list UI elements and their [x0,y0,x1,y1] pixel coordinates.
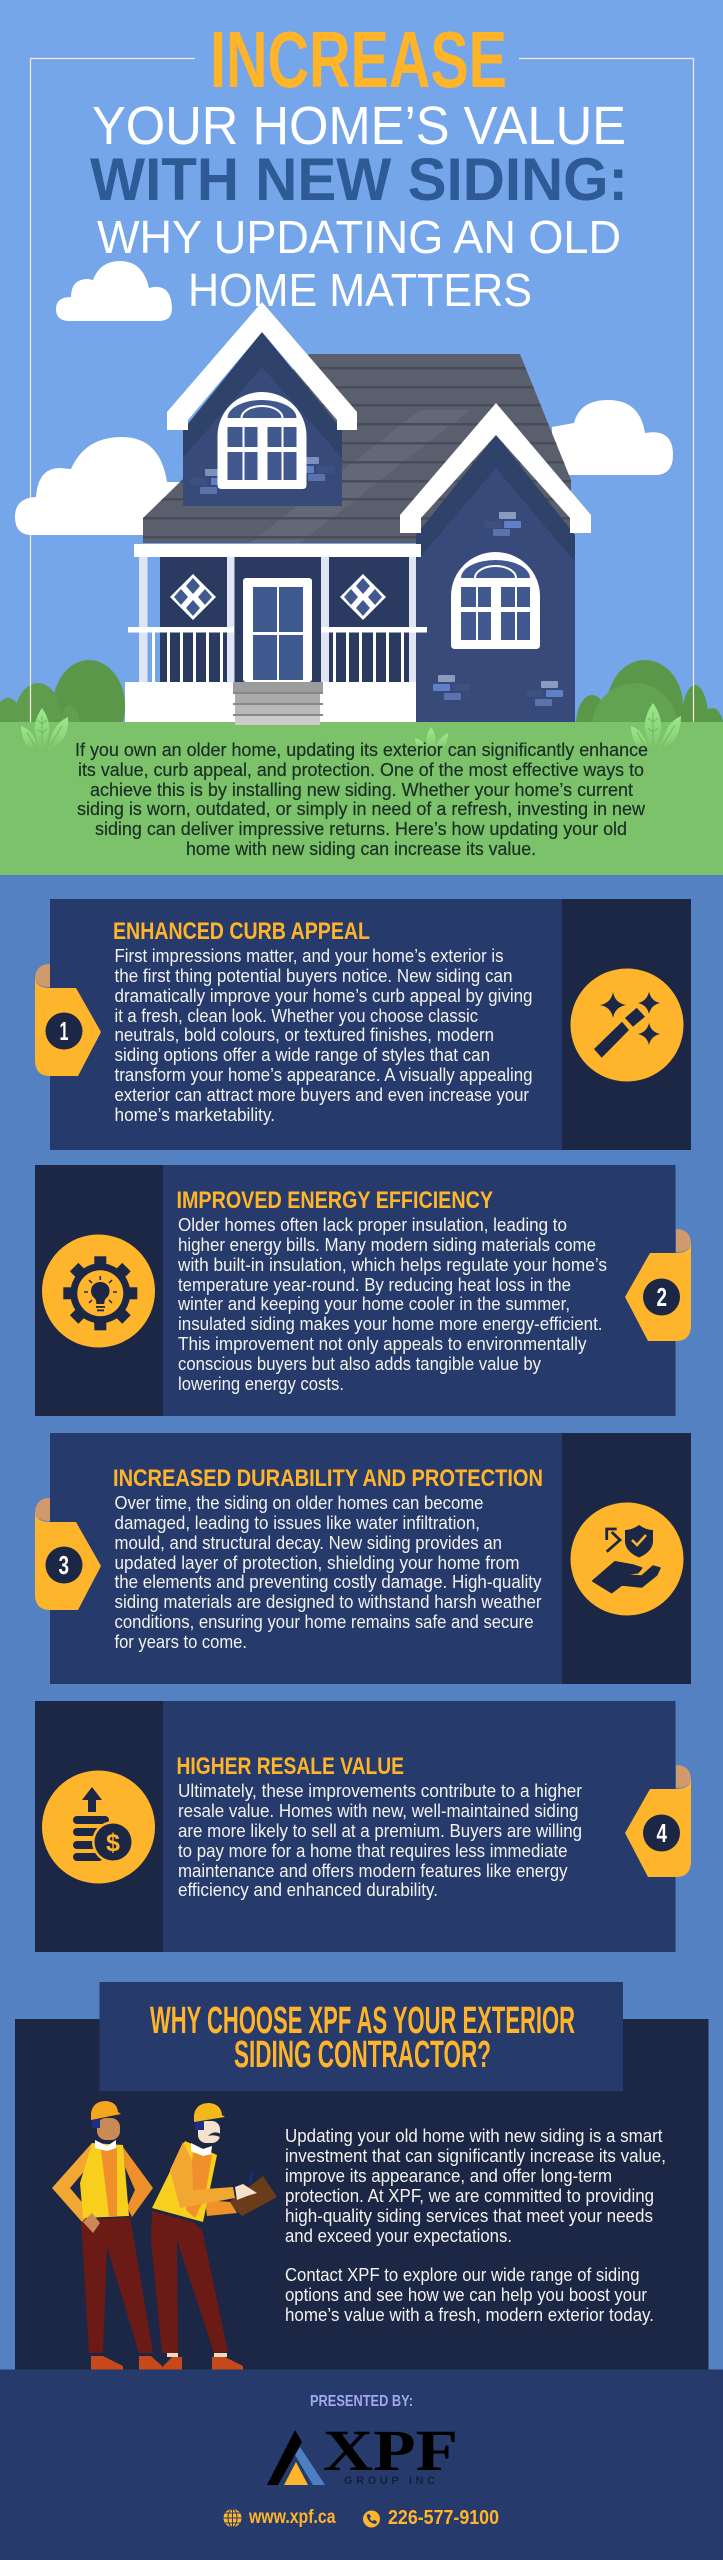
dormer bricks [190,457,334,494]
number tag 2 [625,1229,691,1341]
title: INCREASE [210,15,507,104]
intro paragraph: siding can deliver impressive returns. Here’s how updating your old [95,819,627,839]
body text [114,946,532,1125]
body text: it a fresh, clean look. Whether you choose classic [114,1006,478,1026]
body text: updated layer of protection, shielding your home from [114,1553,520,1573]
body text: higher energy bills. Many modern siding materials come [178,1235,596,1255]
intro paragraph [75,740,648,859]
heading banner: SIDING CONTRACTOR? [234,2034,491,2076]
body text: to pay more for a home that requires less immediate [178,1841,568,1861]
title [90,15,628,316]
website: www.xpf.ca [248,2507,336,2528]
title: YOUR HOME’S VALUE [92,96,626,156]
body text: home’s marketability. [114,1105,275,1125]
porch [125,544,427,723]
intro paragraph: If you own an older home, updating its exterior can significantly enhance [75,740,648,760]
worker left [52,2101,162,2370]
worker right [151,2103,277,2370]
body text: temperature year-round. By reducing heat loss in the [178,1275,571,1295]
green intro band [0,682,723,875]
plant: middle [415,727,448,750]
heading: ENHANCED CURB APPEAL [113,918,370,945]
dormer window [218,392,306,489]
closing text: and exceed your expectations. [285,2226,512,2246]
icon: coins with up arrow [42,1770,155,1884]
dormer [167,302,357,506]
heading banner [100,1982,623,2091]
icon: coins with up arrow: $ [106,1829,120,1857]
house illustration [125,302,591,723]
body text: This improvement not only appeals to environmentally [178,1334,586,1354]
plant: right [631,703,681,750]
heading: HIGHER RESALE VALUE [176,1753,404,1780]
body text: winter and keeping your home cooler in the summer, [177,1294,570,1314]
title: WHY UPDATING AN OLD [97,211,621,263]
heading: INCREASED DURABILITY AND PROTECTION [113,1465,543,1492]
presented by label: PRESENTED BY: [310,2393,413,2410]
diamond window left [170,574,216,620]
icon: magic wand [570,968,684,1082]
body text: siding materials are designed to withstand harsh weather [114,1592,542,1612]
body text: lowering energy costs. [178,1374,344,1394]
body text: are more likely to sell at a premium. Buyers are willing [178,1821,582,1841]
porch roof beam [134,544,421,557]
intro paragraph: its value, curb appeal, and protection. One of the most effective ways to [78,760,644,780]
wing window [451,552,540,649]
sky background [0,0,723,724]
intro paragraph: siding is worn, outdated, or simply in need of a refresh, investing in new [77,799,646,819]
closing text: investment that can significantly increase its value, [285,2146,666,2166]
hero section [0,0,723,771]
website [224,2507,336,2528]
body text: dramatically improve your home’s curb appeal by giving [114,986,532,1006]
body text: with built-in insulation, which helps regulate your home’s [177,1255,607,1275]
closing text: protection. At XPF, we are committed to providing [285,2186,654,2206]
number tag 3 [35,1498,101,1610]
body text: conscious buyers but also adds tangible value by [178,1354,541,1374]
closing text: improve its appearance, and offer long-term [285,2166,612,2186]
panel 2: improved energy efficiency [35,1165,691,1416]
body text: Ultimately, these improvements contribute to a higher [178,1781,582,1801]
title: WITH NEW SIDING: [90,146,628,213]
body text: for years to come. [114,1632,247,1652]
body text: damaged, leading to issues like water infiltration, [114,1513,480,1533]
body text: the first thing potential buyers notice. New siding can [114,966,512,986]
wing bricks [433,512,563,706]
XPF logo [267,2418,458,2487]
body text: insulated siding makes your home more energy-efficient. [178,1314,602,1334]
body text [178,1781,582,1900]
closing text [285,2126,666,2325]
body text: First impressions matter, and your home’s exterior is [114,946,504,966]
illustration: two workers [52,2101,277,2370]
front door [243,578,312,682]
number tag 4: 4 [656,1818,667,1848]
intro paragraph: home with new siding can increase its value. [186,839,536,859]
right gable wing [400,403,591,722]
blue background [0,875,723,2375]
body text: efficiency and enhanced durability. [178,1880,438,1900]
cloud: right [552,400,673,475]
bushes [0,660,723,771]
porch rails [128,627,234,632]
number tag 3: 3 [58,1550,69,1580]
porch balusters [152,632,404,682]
closing text: high-quality siding services that meet your needs [285,2206,653,2226]
closing text: Contact XPF to explore our wide range of siding [285,2265,640,2285]
body text: Older homes often lack proper insulation, leading to [178,1215,567,1235]
footer [0,2370,723,2560]
icon: gear with light bulb [42,1234,155,1348]
panel 4: higher resale value [35,1701,691,1952]
dark panel: why choose XPF [15,1982,708,2370]
body text: siding options offer a wide range of styles that can [114,1045,490,1065]
number tag 1 [35,964,101,1076]
roof [140,354,580,543]
body text [114,1493,542,1652]
icon: hand holding shield [570,1502,684,1616]
intro paragraph: achieve this is by installing new siding. Whether your home’s current [90,780,633,800]
porch columns [139,557,416,682]
heading: IMPROVED ENERGY EFFICIENCY [176,1187,493,1214]
body text: the elements and preventing costly damage. High-quality [114,1572,542,1592]
body text: conditions, ensuring your home remains safe and secure [114,1612,534,1632]
front steps [233,682,323,725]
XPF logo: XPF [323,2418,458,2483]
closing text: options and see how we can help you boost your [285,2285,647,2305]
panel 3: increased durability and protection [35,1433,691,1684]
body text: resale value. Homes with new, well-maintained siding [178,1801,578,1821]
diamond window right [340,574,386,620]
body text: Over time, the siding on older homes can become [114,1493,484,1513]
body text [177,1215,607,1394]
number tag 4 [625,1765,691,1877]
panel 1: enhanced curb appeal [35,899,691,1150]
decorative title frame lines [30,58,694,722]
body text: maintenance and offers modern features like energy [178,1861,568,1881]
body text: transform your home’s appearance. A visually appealing [114,1065,532,1085]
body text: neutrals, bold colours, or textured finishes, modern [114,1025,494,1045]
XPF logo: GROUP INC [344,2475,435,2487]
cloud: large left [15,437,182,535]
cloud: small top left [56,261,172,321]
phone: 226-577-9100 [388,2507,499,2529]
plant: left [21,708,68,750]
title: HOME MATTERS [188,264,532,316]
closing text: Updating your old home with new siding is a smart [285,2126,662,2146]
body text: exterior can attract more buyers and even increase your [114,1085,529,1105]
number tag 1: 1 [60,1016,68,1046]
closing text: home’s value with a fresh, modern exterior today. [285,2305,654,2325]
body text: mould, and structural decay. New siding provides an [114,1533,502,1553]
number tag 2: 2 [656,1282,667,1312]
